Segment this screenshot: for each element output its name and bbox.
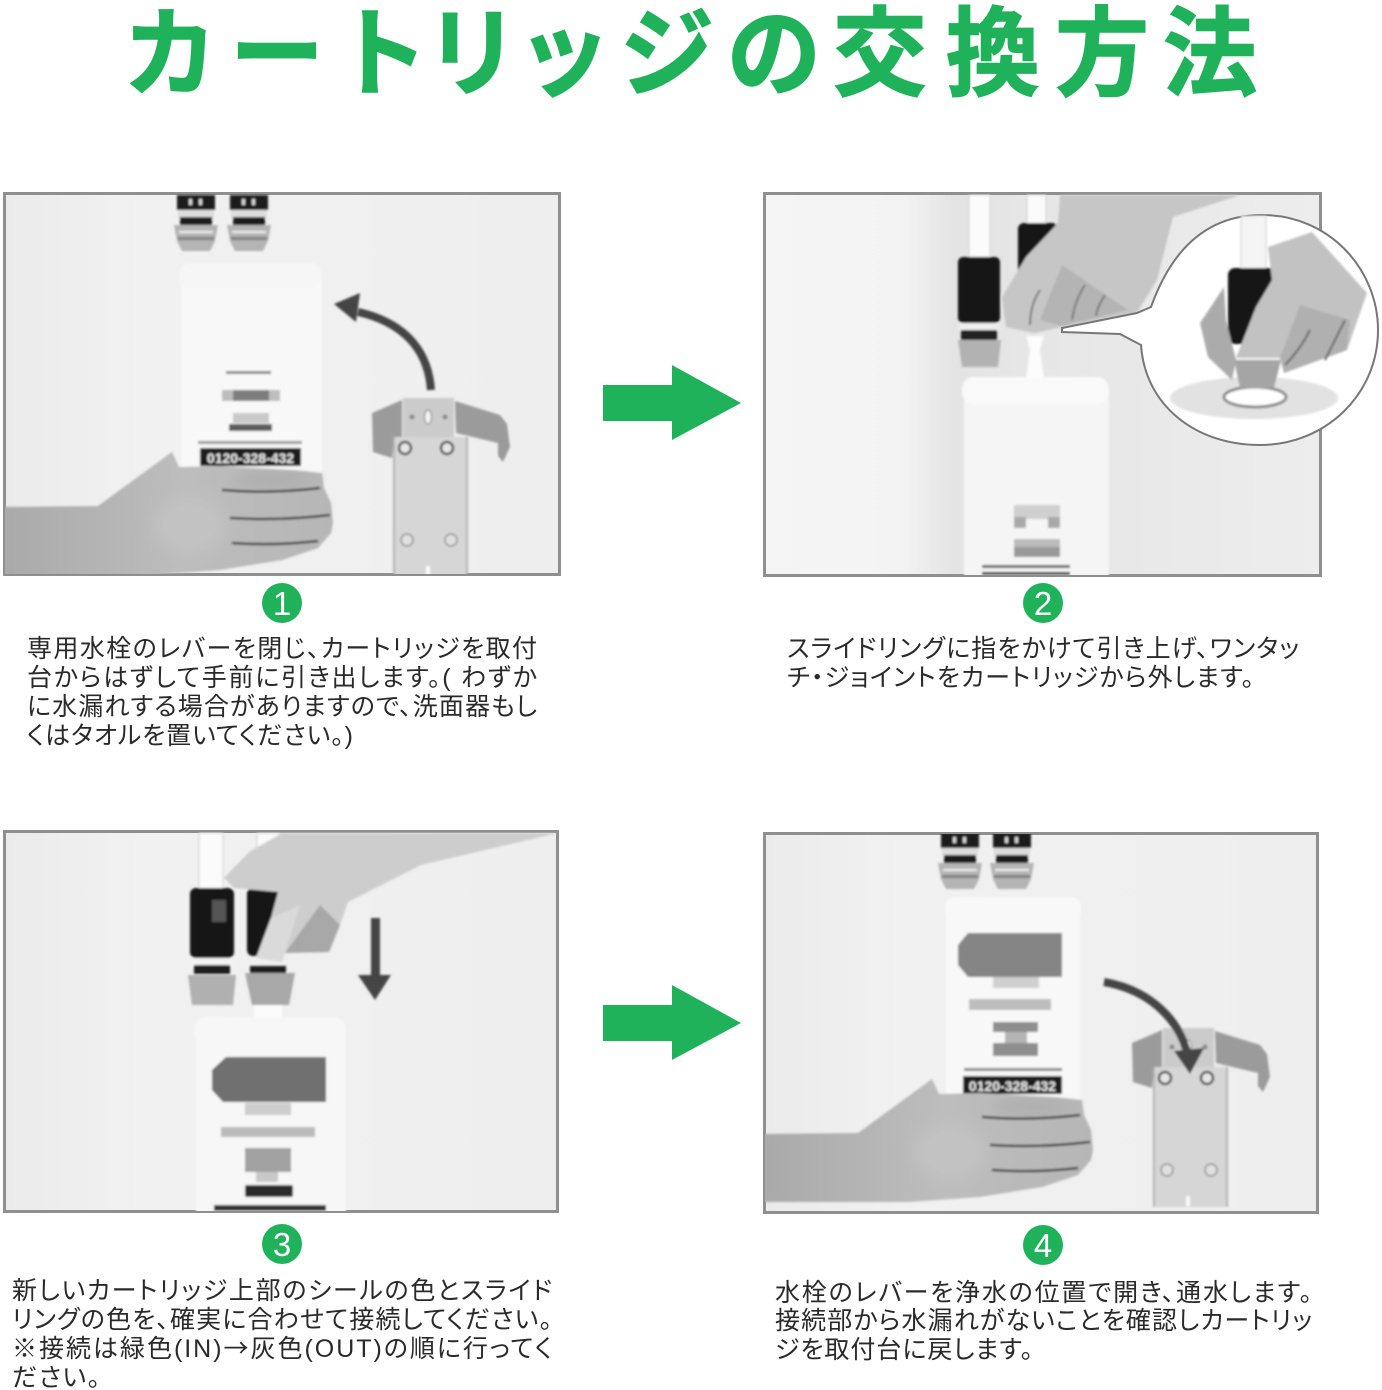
step 3 text: 新しいカートリッジ上部のシールの色とスライド: [12, 1277, 552, 1305]
panel: step 4 photo: [760, 833, 1318, 1212]
contact shadow: [1170, 377, 1338, 419]
step 4 text: 接続部から水漏れがないことを確認しカートリッ: [775, 1307, 1312, 1335]
panel: step 1 photo: [0, 194, 560, 577]
fitting: [1234, 360, 1281, 388]
callout: magnified inset: [1062, 215, 1378, 445]
step 4 text: ジを取付台に戻します。: [775, 1336, 1033, 1364]
arrow: step 3 to step 4: [603, 985, 741, 1060]
arrow: step 1 to step 2: [603, 365, 741, 440]
cartridge: [194, 1056, 348, 1211]
cartridge: [183, 285, 322, 472]
step 2 text: チ・ジョイントをカートリッジから外します。: [787, 664, 1254, 692]
step 2 number: [1023, 583, 1063, 623]
hand: [1002, 195, 1240, 333]
connectors: [174, 195, 271, 251]
pipe: [1241, 216, 1266, 270]
hand right: [1236, 232, 1367, 373]
step 1 text: 台からはずして手前に引き出します。( わずか: [27, 664, 537, 692]
cartridge: 0120-328-432: [969, 1078, 1056, 1094]
ring: [1224, 387, 1286, 407]
step 1 text: 専用水栓のレバーを閉じ、カートリッジを取付: [27, 635, 537, 663]
step 3 text: リングの色を、確実に合わせて接続してください。: [12, 1306, 552, 1334]
step 3 text: [12, 1277, 552, 1390]
bracket: [1132, 1028, 1270, 1207]
title: カートリッジの交換方法: [123, 2, 1257, 109]
connectors: [938, 833, 1034, 889]
step 1 text: に水漏れする場合がありますので、洗面器もし: [27, 693, 537, 721]
hand: [0, 452, 333, 575]
step 1 number: [262, 583, 302, 623]
cartridge: 0120-328-432: [207, 450, 294, 466]
pipes and connectors: [958, 195, 1058, 378]
icon: curved arrow up-left: [334, 293, 431, 390]
icon: down arrow: [358, 918, 391, 1000]
step 3 text: ※接続は緑色(IN)→灰色(OUT)の順に行ってく: [12, 1329, 552, 1365]
step 3 number: [262, 1224, 302, 1264]
fingers left: [1200, 287, 1236, 380]
panel: step 2 photo: [764, 194, 1320, 580]
step 4 number: 4: [1034, 1227, 1052, 1264]
icon: curved arrow down-right: [1104, 982, 1204, 1074]
step 2 number: 2: [1034, 585, 1052, 622]
hand: [760, 1079, 1093, 1202]
step 2 text: [787, 635, 1299, 692]
cartridge: [962, 377, 1109, 580]
step 2 text: スライドリングに指をかけて引き上げ、ワンタッ: [787, 635, 1299, 663]
step 4 text: [775, 1279, 1312, 1364]
bracket: [372, 398, 510, 577]
black joint: [1228, 268, 1276, 344]
step 1 text: [27, 635, 537, 750]
step 1 number: 1: [273, 585, 291, 622]
hand: [224, 833, 558, 962]
step 4 text: 水栓のレバーを浄水の位置で開き、通水します。: [775, 1279, 1312, 1307]
cartridge: [945, 897, 1081, 1105]
step 4 number: [1023, 1225, 1063, 1265]
panel: step 3 photo: [4, 832, 558, 1220]
step 3 number: 3: [273, 1226, 291, 1263]
pipes and connectors: [188, 833, 295, 1017]
step 1 text: くはタオルを置いてください。): [27, 722, 353, 750]
